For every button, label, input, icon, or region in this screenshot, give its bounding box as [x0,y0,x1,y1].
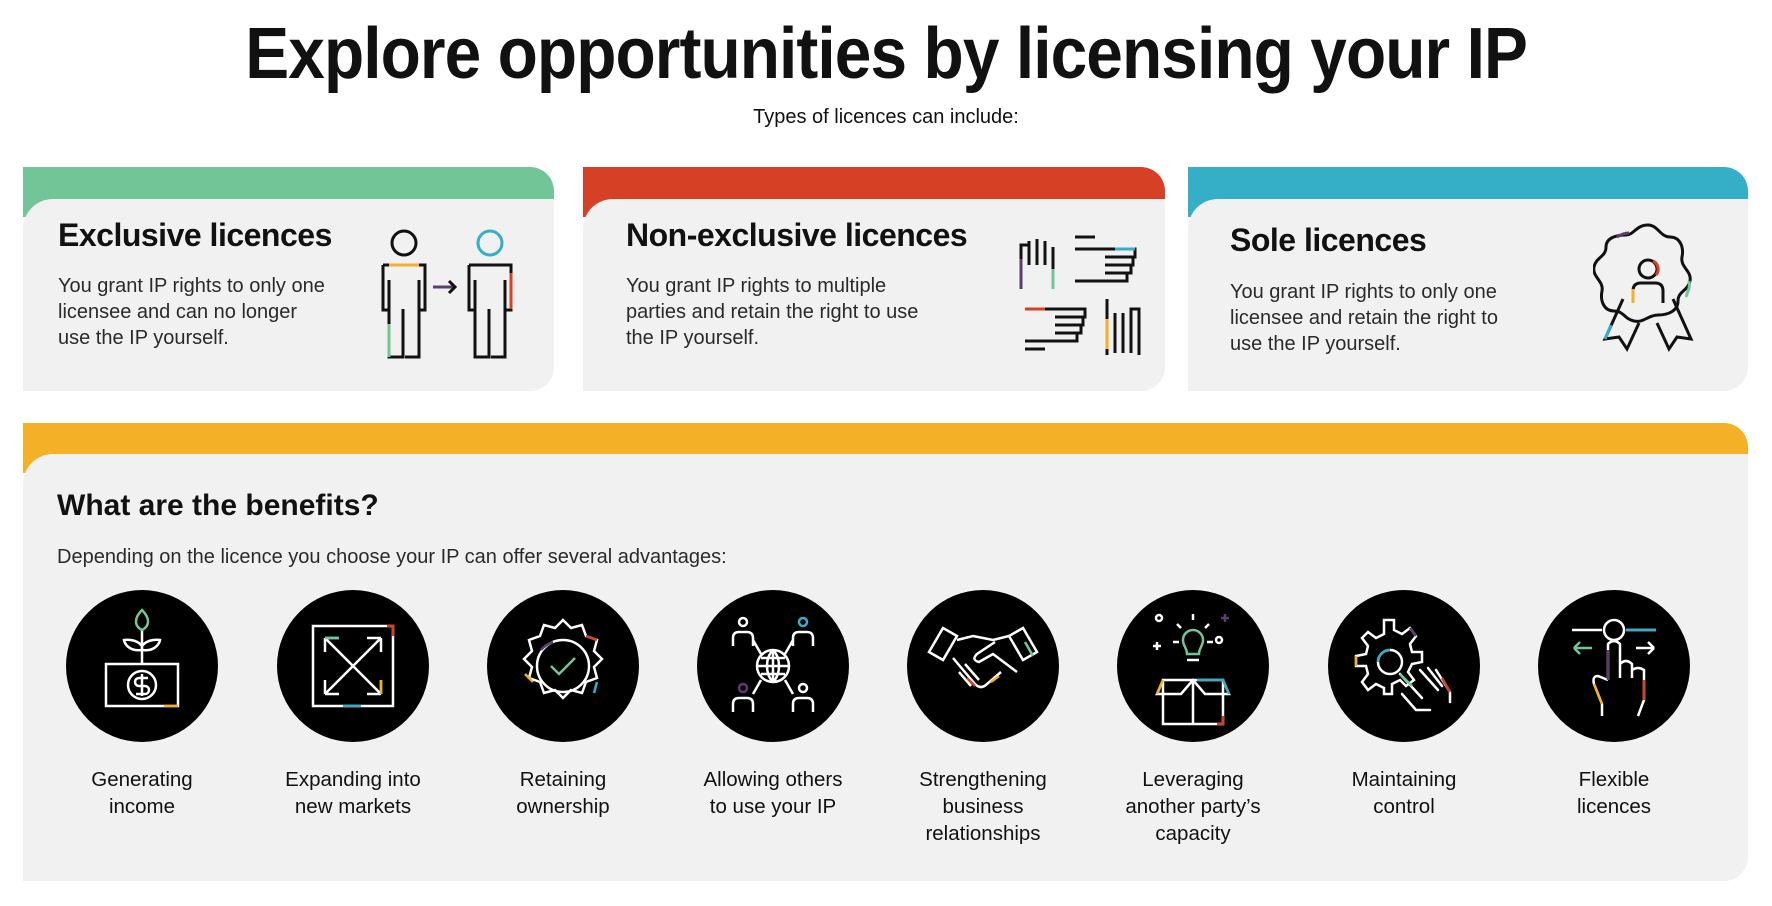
benefit: strengthening relationships [907,590,1059,845]
text: You grant IP rights to only one [1230,281,1497,303]
icon: badge check [487,590,639,742]
icon: swipe hand [1538,590,1690,742]
icon: four hands [1020,236,1140,355]
benefit: maintaining control [1328,590,1480,818]
label: Allowing others [703,768,842,791]
label: Leveraging [1142,768,1244,791]
label [919,768,1047,845]
label: Generating [91,768,193,791]
label: business [943,795,1023,818]
label: Maintaining [1352,768,1456,791]
text: use the IP yourself. [58,327,229,349]
text: You grant IP rights to only one [58,275,325,297]
label [516,768,610,818]
subtitle: Types of licences can include: [753,106,1019,128]
benefit: leveraging capacity [1117,590,1269,845]
benefit: flexible licences [1538,590,1690,818]
benefit: retaining ownership [487,590,639,818]
text: You grant IP rights to multiple [626,275,886,297]
label: to use your IP [710,795,836,818]
panel: benefits [23,423,1748,881]
icon: two people with arrow [382,230,512,358]
label: control [1373,795,1435,818]
heading: Exclusive licences [58,217,332,253]
label [703,768,842,818]
label: new markets [295,795,411,818]
label: Strengthening [919,768,1047,791]
heading: Non-exclusive licences [626,217,967,253]
label [1577,768,1651,818]
label: another party’s [1125,795,1261,818]
text: the IP yourself. [626,327,759,349]
panel: sole licences [1188,167,1748,391]
label: income [109,795,175,818]
icon: gear with hand [1328,590,1480,742]
panel: non-exclusive licences [583,167,1165,391]
text: parties and retain the right to use [626,301,918,323]
benefit: allowing others [697,590,849,818]
text [1230,281,1498,355]
text [58,275,325,349]
label: ownership [516,795,610,818]
icon: globe people [697,590,849,742]
label: relationships [925,822,1041,845]
title: Explore opportunities by licensing your IP [245,14,1527,94]
icon: award rosette [1593,224,1694,352]
label [91,768,193,818]
benefit: generating income [66,590,218,818]
heading: Sole licences [1230,222,1426,258]
icon: handshake [907,590,1059,742]
label: Retaining [520,768,606,791]
label: Flexible [1579,768,1649,791]
text [626,275,918,349]
text: use the IP yourself. [1230,333,1401,355]
benefit: expanding [277,590,429,818]
text: licensee and can no longer [58,301,297,323]
heading: What are the benefits? [57,489,379,522]
label: capacity [1155,822,1231,845]
icon: plant money [66,590,218,742]
label: licences [1577,795,1651,818]
panel: exclusive licences [23,167,554,391]
intro text: Depending on the licence you choose your IP can offer several advantages: [57,546,727,568]
icon: lightbulb box [1117,590,1269,742]
label: Expanding into [285,768,421,791]
icon: expand arrows [277,590,429,742]
label [1352,768,1456,818]
label [285,768,421,818]
label [1125,768,1261,845]
text: licensee and retain the right to [1230,307,1498,329]
